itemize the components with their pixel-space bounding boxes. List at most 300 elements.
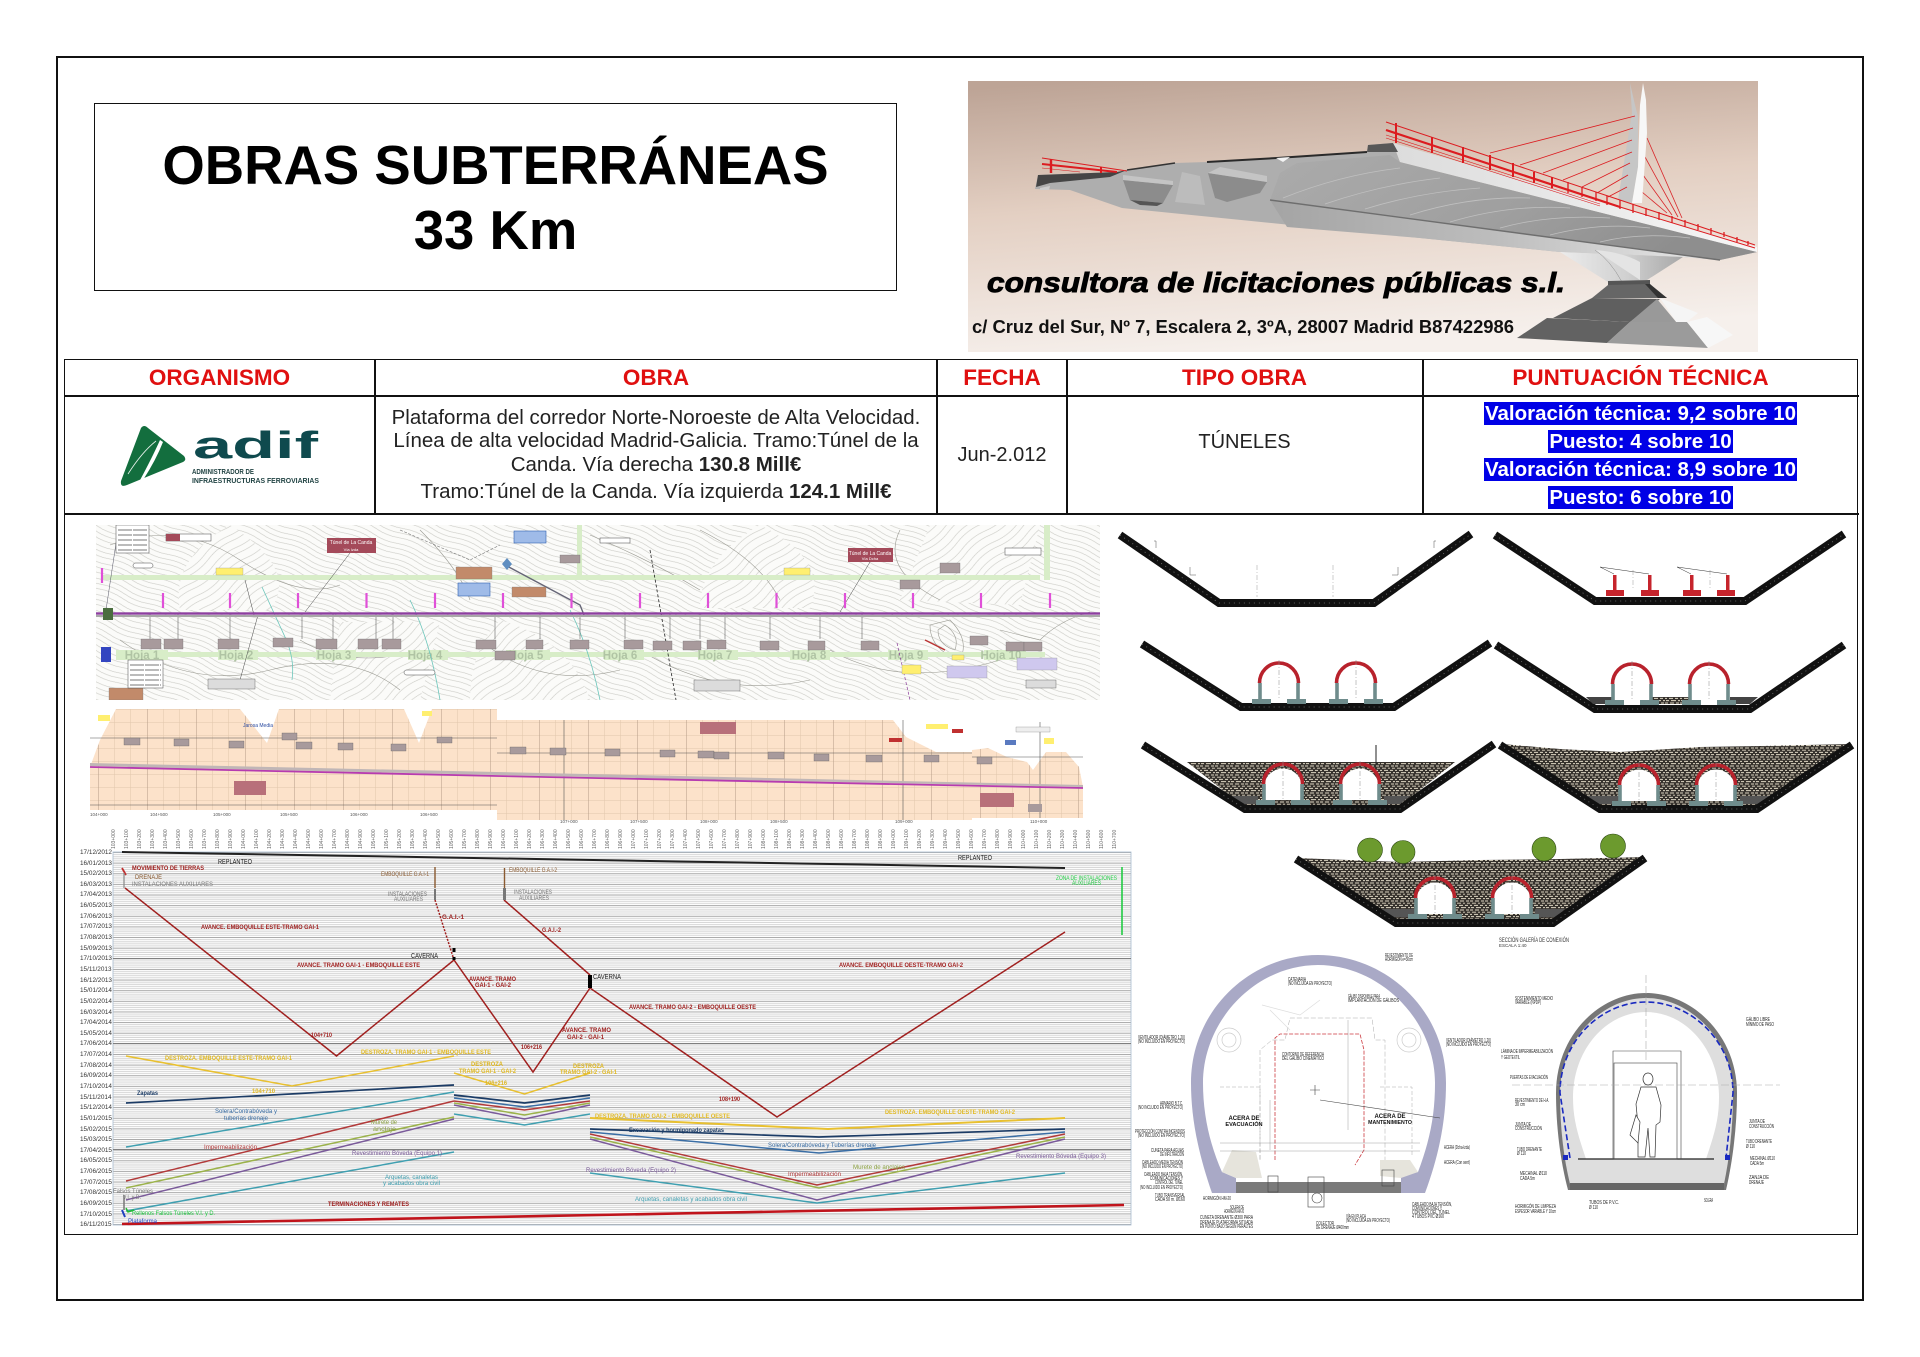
chainage axis: 110+600 — [1099, 830, 1105, 849]
chainage axis: 105+200 — [397, 829, 403, 849]
programme labels: 108+190 — [719, 1096, 740, 1103]
gallery annotations: HORMIGÓN DE LIMPIEZA — [1515, 1203, 1556, 1210]
waterproofing lines — [126, 1101, 1065, 1185]
programme labels: 106+216 — [521, 1044, 542, 1051]
door frame and centre lines — [1512, 975, 1780, 1159]
date axis: 17/06/2015 — [80, 1168, 112, 1175]
chainage axis: 106+300 — [540, 829, 546, 849]
sheet labels: Hoja 8 — [792, 650, 827, 662]
programme labels: EMBOQUILLE G.A.I-1 — [381, 872, 430, 878]
data table frame — [64, 359, 1858, 1235]
profile chainage axis: 104+500 — [150, 812, 168, 817]
technical scores: Valoración técnica: 8,9 sobre 10 — [1485, 458, 1796, 481]
chainage axis: 103+400 — [163, 829, 169, 849]
gallery lining — [1556, 993, 1737, 1190]
chainage axis: 106+700 — [592, 829, 598, 849]
chainage axis: 103+800 — [215, 829, 221, 849]
adif subtitle: ADMINISTRADOR DE — [192, 469, 254, 476]
date axis: 16/09/2014 — [80, 1072, 112, 1079]
gallery annotations: DRENAJE — [1749, 1180, 1764, 1186]
chainage axis: 104+300 — [280, 829, 286, 849]
profile chainage axis: 105+000 — [213, 812, 231, 817]
logo: adif — [120, 425, 319, 486]
floor slab lines — [126, 1092, 1065, 1153]
header: obra: OBRA — [623, 365, 689, 390]
sheet labels — [125, 650, 1021, 662]
railway tunnel cross-section — [1135, 953, 1491, 1231]
programme labels: Arquetas, canaletas y acabados obra civil — [635, 1196, 748, 1203]
stage 3: arches erected — [1142, 643, 1490, 707]
chainage axis: 108+600 — [839, 829, 845, 849]
chainage axis: 110+000 — [1021, 830, 1027, 849]
bench lines — [126, 1056, 1065, 1129]
header: tipo obra: TIPO OBRA — [1182, 365, 1307, 390]
programme labels: DESTROZA. TRAMO GAI-1 - EMBOQUILLE ESTE — [361, 1049, 492, 1056]
date: Jun-2.012 — [958, 444, 1046, 466]
date axis: 17/06/2014 — [80, 1040, 112, 1047]
chainage axis: 106+200 — [527, 829, 533, 849]
chainage axis: 104+100 — [254, 829, 260, 849]
sheet labels: Hoja 9 — [889, 650, 923, 662]
tunnel name labels: Túnel de La Canda — [849, 551, 891, 557]
date axis: 16/05/2013 — [80, 902, 112, 909]
date axis: 17/08/2015 — [80, 1189, 112, 1196]
chainage axis: 107+500 — [696, 829, 702, 849]
chainage axis: 109+300 — [930, 829, 936, 849]
programme labels: DESTROZA. EMBOQUILLE ESTE-TRAMO GAI-1 — [165, 1055, 292, 1062]
tunnel annotations — [1135, 953, 1491, 1231]
adif subtitle — [192, 469, 319, 485]
programme labels: Excavación y hormigonado zapatas — [629, 1127, 724, 1134]
chainage axis: 107+100 — [644, 829, 650, 849]
title heading — [162, 135, 829, 261]
programme labels: V.I. y D. — [123, 1195, 141, 1201]
programme labels: INSTALACIONES — [388, 892, 427, 898]
chainage axis: 103+900 — [228, 829, 234, 849]
programme labels: TRAMO GAI-2 - GAI-1 — [560, 1069, 617, 1076]
walkway labels: ACERA DE — [1374, 1114, 1406, 1120]
stay cables behind pylon — [1642, 138, 1682, 218]
stage 1: excavation — [1120, 534, 1471, 603]
chainage axis: 107+700 — [722, 829, 728, 849]
date axis: 15/11/2013 — [80, 966, 112, 973]
tunnel annotations: PROTECCIÓN CONTRA INCENDIOS — [1135, 1128, 1185, 1135]
programme labels: Revestimiento Bóveda (Equipo 1) — [352, 1150, 442, 1157]
tunnel annotations: COLECTOR — [1316, 1221, 1334, 1227]
chainage axis: 103+600 — [189, 829, 195, 849]
pier — [1560, 250, 1683, 285]
chainage axis: 109+200 — [917, 829, 923, 849]
chainage axis: 104+200 — [267, 829, 273, 849]
chainage axis: 110+400 — [1073, 830, 1079, 849]
tunnel annotations: HORMIGÓN e=30cm — [1385, 956, 1413, 963]
chainage axis: 107+200 — [657, 829, 663, 849]
chainage axis: 105+400 — [423, 829, 429, 849]
gallery section title: ESCALA 1:40 — [1499, 943, 1527, 948]
programme labels: AVANCE. EMBOQUILLE ESTE-TRAMO GAI-1 — [201, 924, 319, 931]
gallery annotations: LÁMINA DE IMPERMEABILIZACIÓN — [1501, 1048, 1553, 1055]
date axis: 17/08/2014 — [80, 1062, 112, 1069]
programme labels: Zapatas — [137, 1090, 158, 1097]
gallery annotations: PUERTAS DE EVACUACIÓN — [1510, 1074, 1548, 1081]
profile chainage axis: 108+500 — [770, 819, 788, 824]
walkway labels: EVACUACIÓN — [1225, 1120, 1263, 1128]
programme labels: GAI-1 - GAI-2 — [475, 982, 511, 989]
chainage axis — [111, 829, 1118, 849]
sheet labels: Hoja 3 — [317, 650, 351, 662]
sheet labels: Hoja 4 — [408, 650, 443, 662]
title box — [94, 103, 897, 291]
chainage axis: 108+700 — [852, 829, 858, 849]
date axis: 15/11/2014 — [80, 1094, 112, 1101]
gallery annotations: 30 cm — [1515, 1102, 1525, 1108]
programme labels: G.A.I.-2 — [542, 927, 561, 934]
profile chainage axis: 107+000 — [560, 819, 578, 824]
date axis: 16/03/2013 — [80, 881, 112, 888]
chainage axis: 106+900 — [618, 829, 624, 849]
tunnel annotations: CUNETA DRENANTE Ø300 PARA — [1200, 1215, 1253, 1221]
tunnel annotations: CABLEADO MEDIA TENSIÓN — [1142, 1159, 1183, 1166]
header: organismo: ORGANISMO — [149, 365, 290, 390]
date axis: 17/07/2015 — [80, 1179, 112, 1186]
programme labels: anclaje — [373, 1126, 396, 1133]
gallery annotations: GÁLIBO LIBRE — [1746, 1016, 1770, 1023]
tunnel annotations: DE INFILTRACIÓN — [1160, 1151, 1184, 1158]
chainage axis: 106+000 — [501, 829, 507, 849]
red railings and cables — [1042, 116, 1755, 248]
programme labels: DESTROZA. EMBOQUILLE OESTE-TRAMO GAI-2 — [885, 1109, 1015, 1116]
gallery annotations: Ø 110 — [1589, 1205, 1598, 1211]
terrain sections — [90, 709, 1083, 820]
drain pipe and details — [1268, 1085, 1440, 1207]
chainage axis: 105+000 — [371, 829, 377, 849]
chainage axis: 104+400 — [293, 829, 299, 849]
company name: consultora de licitaciones públicas s.l. — [987, 267, 1565, 298]
tunnel annotations: TUBO TRANSVERSAL — [1155, 1193, 1185, 1199]
programme labels: 104+710 — [252, 1088, 275, 1095]
chainage axis: 107+900 — [748, 829, 754, 849]
date axis: 15/05/2014 — [80, 1030, 112, 1037]
chainage axis: 108+400 — [813, 829, 819, 849]
profile chainage axis: 107+500 — [630, 819, 648, 824]
tunnel lining — [1191, 955, 1446, 1193]
project description: Canda. Vía derecha 130.8 Mill€ — [511, 453, 801, 476]
programme labels: Revestimiento Bóveda (Equipo 2) — [586, 1167, 676, 1174]
adif wordmark: adif — [193, 425, 319, 467]
programme labels: TRAMO GAI-1 - GAI-2 — [459, 1068, 516, 1075]
walkway labels: ACERA DE — [1228, 1116, 1260, 1122]
tunnel annotations: (NO INCLUIDO EN PROYECTO) — [1138, 1105, 1183, 1111]
date axis: 15/02/2014 — [80, 998, 112, 1005]
programme labels: CAVERNA — [411, 953, 438, 960]
gallery annotations: JUNTA DE — [1515, 1122, 1531, 1128]
tunnel annotations: VENTILADOR (DIÁMETRO 1,20) — [1138, 1034, 1185, 1041]
chainage axis: 108+900 — [878, 829, 884, 849]
tunnel annotations: (NO INCLUIDO EN PROYECTO) — [1138, 1039, 1185, 1045]
clearance gauges — [1220, 1000, 1420, 1165]
tunnel name labels: Vía Dcha — [862, 556, 879, 561]
programme labels: Solera/Contrabóveda y — [215, 1108, 278, 1115]
technical scores: Valoración técnica: 9,2 sobre 10 — [1485, 402, 1796, 425]
tunnel annotations: CADA 50 m. Ø160 — [1155, 1197, 1185, 1203]
profile chainage axis: 106+000 — [350, 812, 368, 817]
tunnel annotations: ACERA (Con sent) — [1444, 1160, 1470, 1166]
sheet labels: Hoja 10 — [981, 650, 1021, 662]
programme labels: DESTROZA — [573, 1063, 604, 1070]
title heading: OBRAS SUBTERRÁNEAS — [162, 135, 829, 196]
chainage axis: 107+800 — [735, 829, 741, 849]
vault lining lines — [126, 1105, 1065, 1200]
tunnel annotations: CABLEADO BAJA TENSIÓN, — [1144, 1171, 1183, 1178]
chainage axis: 110+300 — [1060, 830, 1066, 849]
date axis: 16/09/2015 — [80, 1200, 112, 1207]
chainage axis: 104+500 — [306, 829, 312, 849]
longitudinal profile — [90, 709, 1083, 824]
date axis: 15/09/2013 — [80, 945, 112, 952]
technical scores: Puesto: 6 sobre 10 — [1549, 486, 1732, 509]
sheet labels: Hoja 7 — [698, 650, 732, 662]
tunnel annotations: HORMIGÓN HM-20 — [1224, 1208, 1244, 1215]
programme labels: REPLANTEO — [958, 855, 992, 862]
chainage axis: 109+700 — [982, 829, 988, 849]
date axis: 15/12/2014 — [80, 1104, 112, 1111]
tunnel annotations: CONTORNO DE REFERENCIA — [1282, 1052, 1324, 1058]
date axis: 15/01/2015 — [80, 1115, 112, 1122]
profile callouts: Jarosa Media — [243, 723, 273, 729]
programme labels: MOVIMIENTO DE TIERRAS — [132, 865, 205, 872]
tunnel name labels: Vía Izda — [344, 547, 359, 552]
date axis: 17/04/2014 — [80, 1019, 112, 1026]
chainage axis: 105+300 — [410, 829, 416, 849]
tunnel alignment — [96, 608, 1100, 620]
icons: trees — [1358, 834, 1626, 867]
date axis: 17/07/2014 — [80, 1051, 112, 1058]
tunnel annotations: EN PUNTO BAJO SEGÚN PERALTES — [1200, 1223, 1253, 1230]
chainage axis: 109+900 — [1008, 829, 1014, 849]
programme labels: AVANCE. EMBOQUILLE OESTE-TRAMO GAI-2 — [839, 962, 963, 969]
tunnel annotations: IMPLANTACIÓN DE GÁLIBOS — [1348, 997, 1399, 1004]
profile chainage axis: 110+000 — [1030, 819, 1048, 824]
date axis: 17/10/2014 — [80, 1083, 112, 1090]
chainage axis: 103+100 — [124, 829, 130, 849]
construction stage sections — [1118, 530, 1854, 927]
gallery annotations: SOSTENIMIENTO MEDIO — [1515, 996, 1553, 1002]
tunnel annotations: (NO INCLUIDA EN PROYECTO) — [1346, 1218, 1390, 1224]
programme labels: EMBOQUILLE G.A.I-2 — [509, 868, 558, 874]
tunnel annotations: COMUNICACIONES Y — [1412, 1206, 1442, 1212]
tunnel annotations: (NO INCLUIDO EN PROYECTO) — [1140, 1185, 1183, 1191]
tunnel annotations: HORMIGÓN HM-20 — [1203, 1195, 1231, 1202]
chainage axis: 110+500 — [1086, 830, 1092, 849]
contour variation patches — [179, 525, 1040, 700]
gallery annotations: MECHINAL Ø110 — [1520, 1171, 1547, 1177]
gallery annotations: TUBO DRENANTE — [1517, 1147, 1542, 1153]
profile chainage axis: 108+000 — [700, 819, 718, 824]
programme labels: AUXILIARES — [1072, 881, 1101, 887]
chainage axis: 108+200 — [787, 829, 793, 849]
stage 5: partial backfill — [1143, 744, 1494, 809]
header: fecha: FECHA — [963, 365, 1041, 390]
programme labels: Falsos Túneles — [113, 1189, 153, 1195]
programme lines — [122, 852, 1124, 1224]
chainage axis: 110+200 — [1047, 830, 1053, 849]
programme labels: INSTALACIONES — [514, 890, 552, 896]
programme labels: CAVERNA — [593, 974, 621, 981]
pylon — [1618, 83, 1647, 203]
gallery annotations: CADA 5m — [1750, 1161, 1764, 1167]
icon: adif green triangle — [121, 426, 185, 486]
date axis: 15/03/2015 — [80, 1136, 112, 1143]
sheet labels: Hoja 5 — [509, 650, 544, 662]
footing lines — [126, 1085, 1065, 1137]
tunnel annotations: CONTROL DEL TÚNEL — [1412, 1209, 1450, 1216]
tunnel annotations: VÍA EN PLACA — [1346, 1213, 1366, 1220]
tunnel annotations: CABLEADO BAJA TENSIÓN, — [1412, 1201, 1452, 1208]
chainage axis: 103+000 — [111, 829, 117, 849]
access gallery bars — [124, 867, 590, 988]
chainage axis: 105+600 — [449, 829, 455, 849]
gallery annotations — [1501, 996, 1775, 1215]
company address: c/ Cruz del Sur, Nº 7, Escalera 2, 3ºA, 28007 Madrid B87422986 — [972, 317, 1514, 337]
stage 4: drainage layers — [1496, 645, 1844, 709]
programme labels: Solera/Contrabóveda y Tuberías drenaje — [768, 1142, 876, 1149]
technical scores — [1484, 402, 1797, 509]
date axis: 17/08/2013 — [80, 934, 112, 941]
streams and dashed lines — [106, 530, 945, 700]
chainage axis: 104+000 — [241, 829, 247, 849]
tunnel annotations: CONTROL DEL TÚNEL — [1155, 1179, 1183, 1186]
chainage axis: 108+000 — [761, 829, 767, 849]
stage 7: finished with trees — [1296, 834, 1645, 923]
programme labels: 106+216 — [485, 1080, 507, 1087]
programme labels: GAI-2 - GAI-1 — [567, 1034, 604, 1041]
programme labels: Rellenos Falsos Túneles V.I. y D. — [132, 1211, 215, 1217]
technical scores: Puesto: 4 sobre 10 — [1549, 430, 1732, 453]
date axis: 17/07/2013 — [80, 923, 112, 930]
company logo: bridge illustration — [968, 81, 1758, 352]
tunnel annotations: GÁLIBO DISPONIBLE PARA — [1348, 993, 1380, 1000]
programme labels: REPLANTEO — [218, 859, 252, 866]
tunnel annotations: DRENAJE PLATAFORMA SITUADA — [1200, 1220, 1253, 1226]
gallery annotations: Y GEOTEXTIL — [1501, 1055, 1520, 1061]
date axis: 15/02/2013 — [80, 870, 112, 877]
gallery annotations: ESPESOR VARIABLE Y 10cm — [1515, 1209, 1556, 1215]
chainage axis: 103+300 — [150, 829, 156, 849]
profile chainage axis — [90, 812, 1048, 824]
tunnel annotations: CUNETA PARA AGUAS — [1151, 1148, 1184, 1154]
installation zone bar — [1121, 867, 1123, 935]
chainage axis: 106+400 — [553, 829, 559, 849]
tunnel annotations: (NO INCLUIDA EN PROYECTO) — [1288, 981, 1332, 987]
stepped pyramid base — [1517, 284, 1733, 348]
programme labels: tuberías drenaje — [224, 1115, 268, 1122]
gallery annotations: JUNTA DE — [1749, 1119, 1765, 1125]
chainage axis: 103+200 — [137, 829, 143, 849]
programme labels: AVANCE. TRAMO — [469, 976, 516, 983]
tunnel annotations: (NO INCLUIDO EN PROYECTO) — [1138, 1133, 1185, 1139]
site setup line — [122, 852, 1065, 868]
stage 6: full backfill — [1500, 744, 1852, 810]
programme labels: Murete de anclajes — [853, 1164, 906, 1171]
gallery annotations: TUBOS DE P.V.C. — [1589, 1200, 1619, 1206]
tunnel annotations: DEL GÁLIBO CINEMÁTICO — [1282, 1055, 1324, 1062]
plan view map — [96, 525, 1100, 700]
chainage axis: 109+800 — [995, 829, 1001, 849]
programme labels: G.A.I.-1 — [442, 914, 464, 921]
gallery annotations: Ø 110 — [1517, 1151, 1526, 1157]
date axis: 16/01/2013 — [80, 860, 112, 867]
profile chainage axis: 104+000 — [90, 812, 108, 817]
date axis: 15/01/2014 — [80, 987, 112, 994]
project description: Plataforma del corredor Norte-Noroeste de Alta Velocidad. — [392, 406, 920, 429]
chainage axis: 106+500 — [566, 829, 572, 849]
tunnel annotations: ARMARIO B.T.C. — [1160, 1101, 1183, 1107]
chainage axis: 108+800 — [865, 829, 871, 849]
programme labels: DESTROZA. TRAMO GAI-2 - EMBOQUILLE OESTE — [595, 1113, 731, 1120]
gallery annotations: REVESTIMIENTO DE H.A. — [1515, 1098, 1549, 1104]
programme labels: AVANCE. TRAMO GAI-2 - EMBOQUILLE OESTE — [629, 1004, 757, 1011]
chainage axis: 103+700 — [202, 829, 208, 849]
programme labels: Impermeabilización — [788, 1171, 841, 1178]
chainage axis: 107+600 — [709, 829, 715, 849]
profile chainage axis: 106+500 — [420, 812, 438, 817]
green corridor bands — [103, 525, 1050, 660]
date axis: 16/11/2015 — [80, 1221, 112, 1228]
chainage axis: 105+700 — [462, 829, 468, 849]
chainage axis: 106+600 — [579, 829, 585, 849]
chainage axis: 104+700 — [332, 829, 338, 849]
chainage axis: 109+000 — [891, 829, 897, 849]
ventilators — [1217, 1028, 1421, 1052]
chainage axis: 108+500 — [826, 829, 832, 849]
chainage axis: 107+000 — [631, 829, 637, 849]
programme labels: AUXILIARES — [519, 896, 549, 902]
cut and cover and platform ticks — [122, 1195, 134, 1217]
chainage axis: 105+800 — [475, 829, 481, 849]
tunnel grade line — [90, 763, 1083, 788]
date axis: 16/03/2014 — [80, 1009, 112, 1016]
tunnel annotations: CATENARIA — [1288, 977, 1306, 983]
chainage axis: 108+100 — [774, 829, 780, 849]
programme labels: DESTROZA — [471, 1061, 503, 1068]
gallery annotations: VARIABLE (NPDP) — [1515, 1000, 1541, 1006]
programme labels — [113, 855, 1117, 1225]
chainage axis: 108+300 — [800, 829, 806, 849]
chainage axis: 104+600 — [319, 829, 325, 849]
sheet labels: Hoja 6 — [603, 650, 637, 662]
profile chainage axis: 105+500 — [280, 812, 298, 817]
programme labels: Impermeabilización — [204, 1144, 257, 1151]
chainage axis: 109+400 — [943, 829, 949, 849]
chainage axis: 103+500 — [176, 829, 182, 849]
chainage axis: 107+400 — [683, 829, 689, 849]
chainage axis: 109+100 — [904, 829, 910, 849]
gallery annotations: CADA 5m — [1520, 1176, 1535, 1182]
tunnel name labels — [327, 538, 893, 562]
gallery annotations: SOLERA — [1704, 1198, 1713, 1204]
date axis: 17/04/2013 — [80, 891, 112, 898]
programme labels: TERMINACIONES Y REMATES — [328, 1201, 410, 1208]
programme labels: AVANCE. TRAMO GAI-1 - EMBOQUILLE ESTE — [297, 962, 421, 969]
small callouts on map — [101, 525, 1057, 700]
work programme chart — [80, 829, 1132, 1228]
chainage axis: 105+900 — [488, 829, 494, 849]
programme labels: y acabados obra civil — [383, 1180, 441, 1187]
project description — [392, 406, 920, 503]
date axis: 17/12/2012 — [80, 849, 112, 856]
anchor wall lines — [126, 1103, 1065, 1188]
leader lines — [150, 553, 870, 680]
